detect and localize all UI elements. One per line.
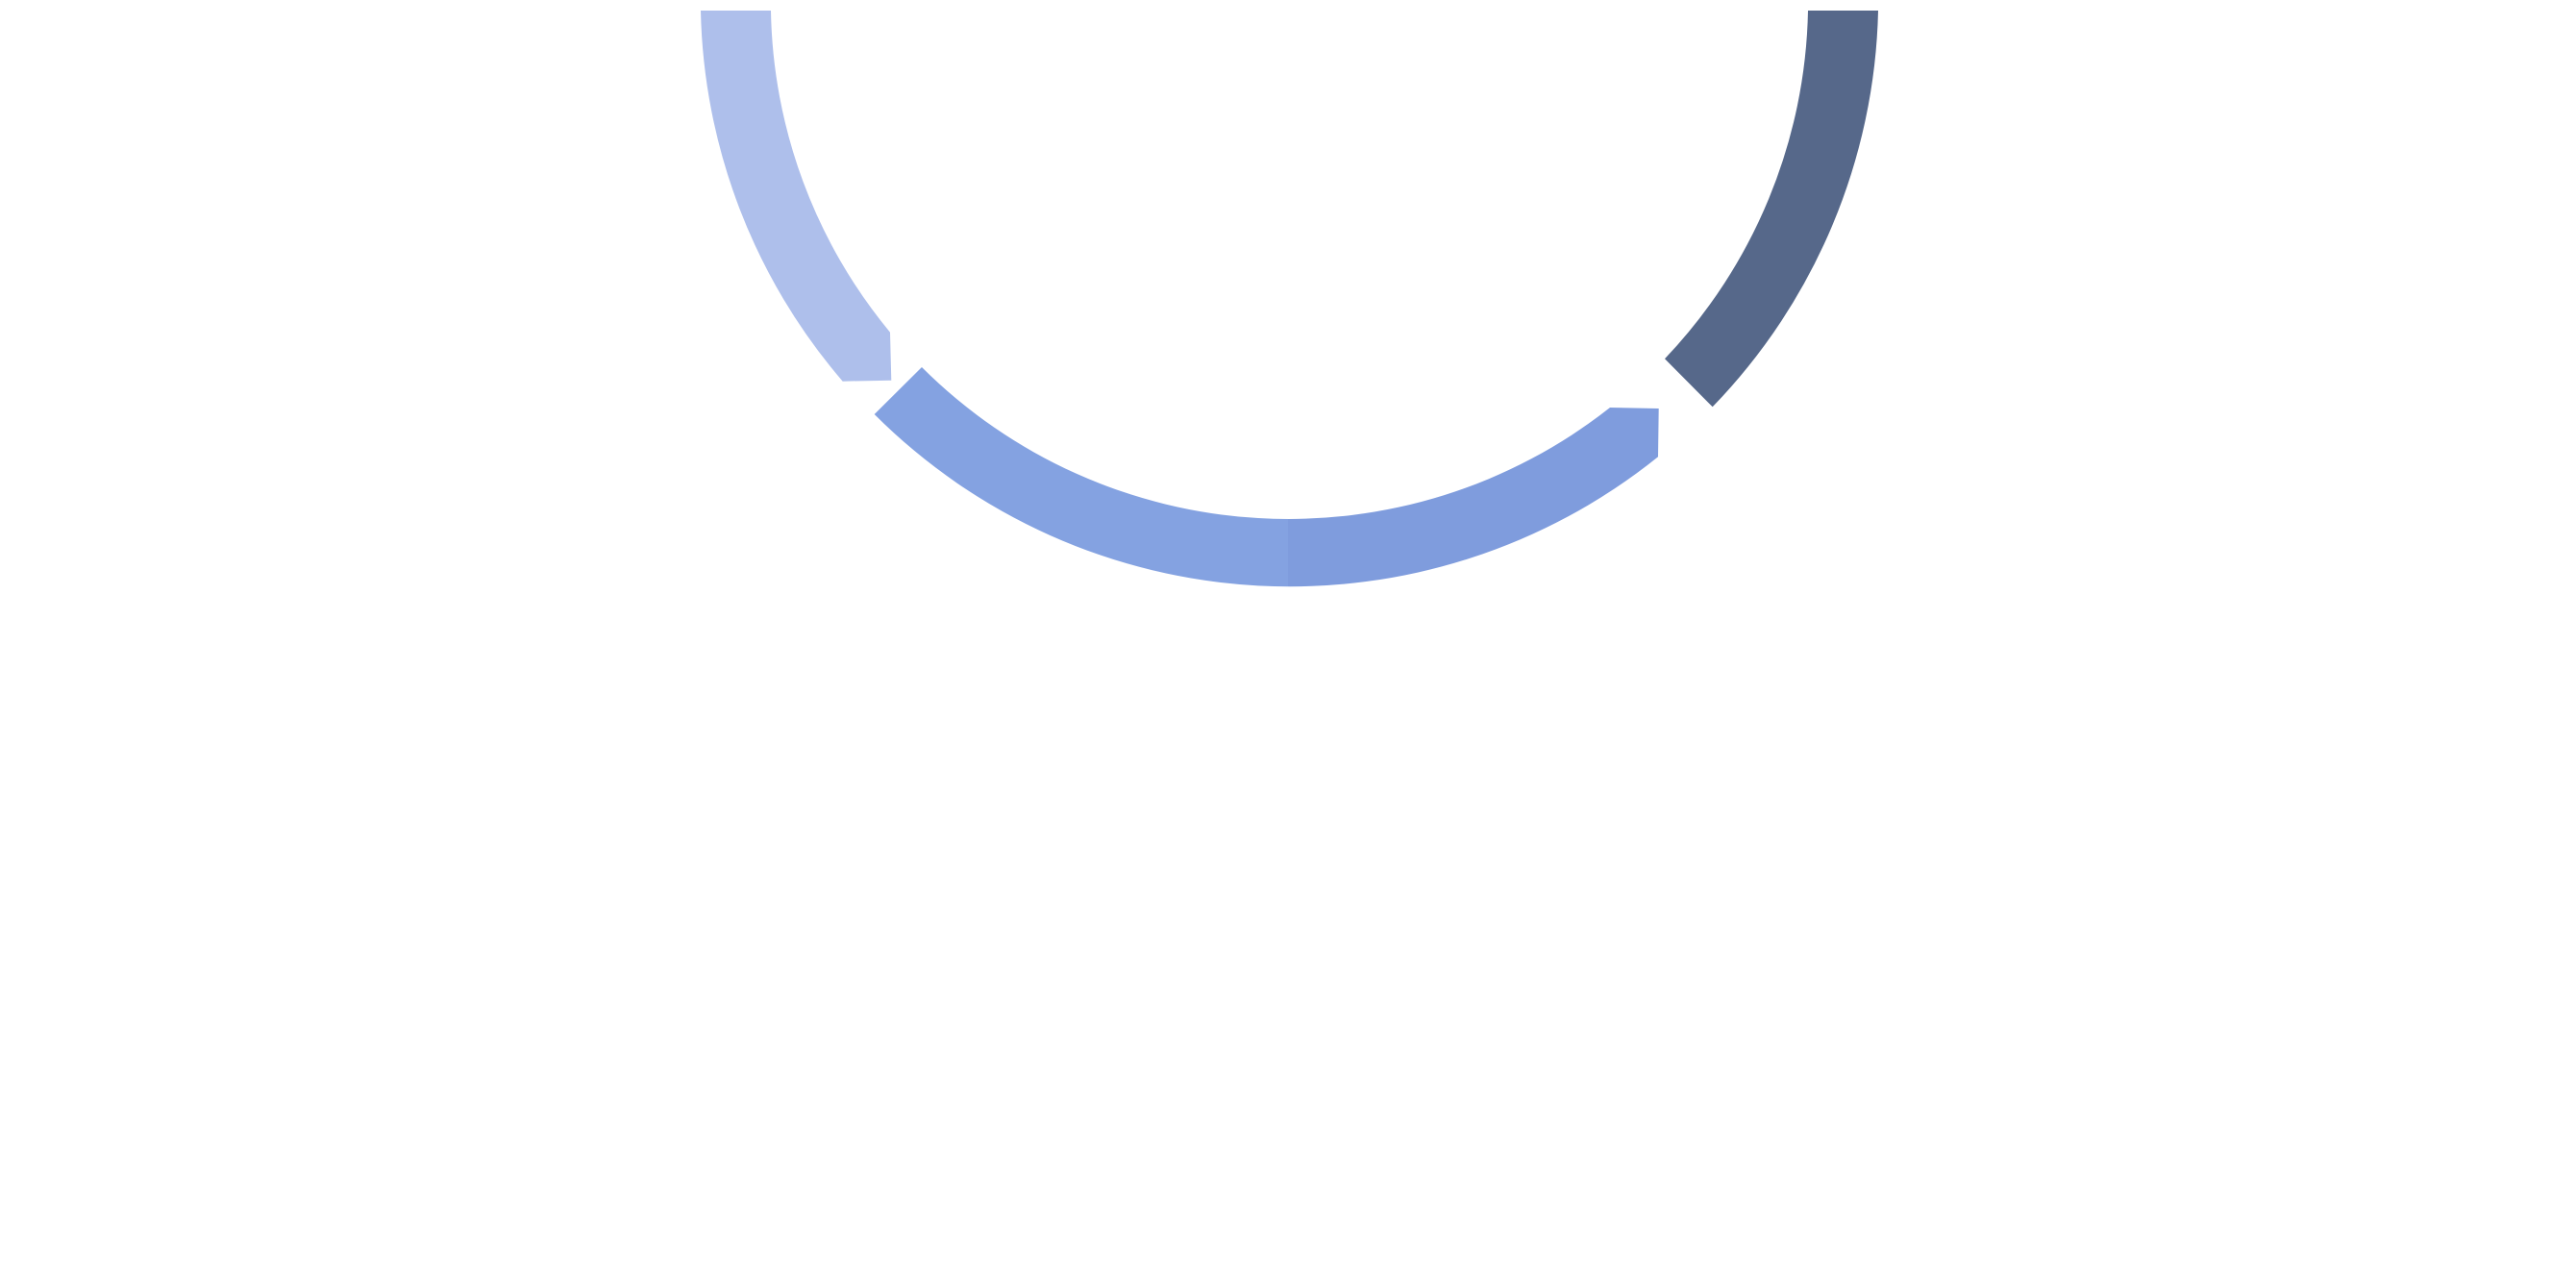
ring segment: medium blue bottom bbox=[875, 367, 1659, 586]
ring segment: light blue left bbox=[701, 11, 891, 382]
ring segment: dark slate right bbox=[1665, 11, 1878, 407]
